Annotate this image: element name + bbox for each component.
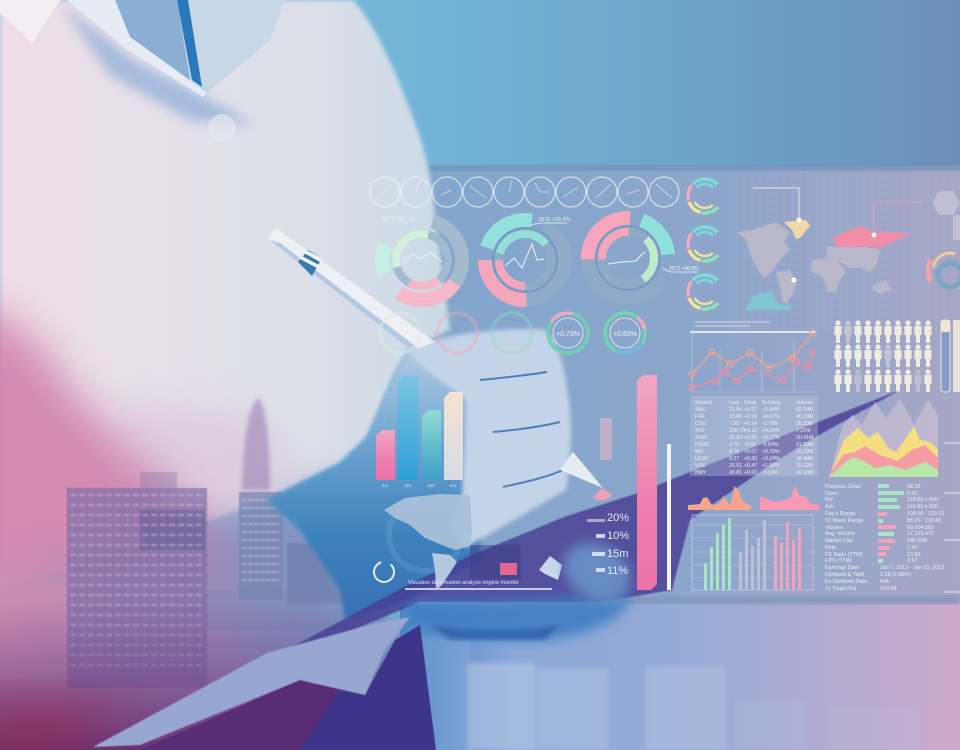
clipboard paper and base: [93, 617, 436, 750]
segmented donut column: [688, 179, 722, 309]
Europe and Asia: [826, 246, 880, 272]
South America: [776, 270, 797, 304]
paper sheet: [93, 617, 410, 747]
background city buildings, lower right: [420, 637, 920, 750]
panel bottom shadow: [620, 596, 960, 604]
stock data table: MO: [695, 449, 703, 455]
stock data table: +0.07: [744, 449, 757, 455]
stock data table: XOI: [695, 428, 704, 434]
small ring icon: [374, 562, 394, 582]
bottom white rule: [405, 588, 552, 590]
bar chart: [692, 515, 813, 590]
right edge ring chart: [928, 248, 960, 292]
small orange area chart: [688, 486, 751, 510]
pink blot: [593, 488, 612, 500]
shirt torso: [0, 0, 450, 590]
gauge values: [556, 331, 637, 338]
pink bars: [774, 522, 801, 590]
stock stats list: 108.56 - 119.15: [907, 511, 944, 517]
thin white bar: [667, 444, 671, 590]
collar and tie: [0, 0, 285, 142]
collar shadow: [60, 3, 255, 125]
percentage labels and bars: [587, 512, 629, 577]
stock data table: 16.22M: [796, 463, 813, 469]
stock data table: +0.14: [744, 421, 757, 427]
stock data table: BMY: [695, 470, 707, 476]
panel grid texture: [730, 170, 960, 330]
stock data table: -0.22: [744, 442, 756, 448]
pale tower silhouette: [242, 398, 270, 490]
stock data table: 8.70: [729, 449, 739, 455]
Russia: [833, 226, 910, 248]
stock stats list: Beta: [825, 545, 836, 551]
stock data table: +3.24%: [762, 456, 780, 462]
donut chart 1: [382, 217, 462, 300]
stock data table: VSX: [695, 463, 706, 469]
shirt button: [208, 114, 236, 142]
red map block: [500, 563, 517, 575]
Australia: [873, 280, 892, 294]
globe map overlay: [374, 494, 562, 590]
right collar: [67, 0, 207, 97]
stock stats list: Bid: [825, 497, 833, 503]
panel top edge: [430, 165, 960, 171]
North America: [737, 222, 790, 278]
stock data table: 21.03M: [796, 442, 813, 448]
stock data table: 19.23M: [796, 449, 813, 455]
stock data table: +0.27: [744, 407, 757, 413]
neck shadow: [115, 0, 190, 80]
stock stats list: 88.20 - 119.60: [907, 518, 941, 524]
pink stat bars: [878, 512, 896, 556]
stock stats list: Market Cap: [825, 538, 853, 544]
stock data table: FXF: [695, 414, 705, 420]
stock data table: +0.77%: [762, 435, 780, 441]
stock stats list: 52 Week Range: [825, 518, 864, 524]
axis labels: S02: [404, 483, 412, 488]
tall pink bar: [637, 375, 657, 590]
left collar: [0, 0, 60, 43]
left 3D bar chart: [376, 376, 463, 488]
stock data table: 30.54: [729, 435, 742, 441]
stock stats list: Day's Range: [825, 511, 856, 517]
stock stats list: PE Ratio (TTM): [825, 552, 863, 558]
stock data table: +0.47: [744, 463, 757, 469]
grey bars: [739, 520, 766, 590]
percentage labels and bars: 11%: [607, 565, 628, 577]
purple clipboard diagonal: [290, 390, 900, 652]
stock data table: 9.07: [729, 456, 739, 462]
stock data table: -0.19%: [762, 470, 779, 476]
stock data table: 45.23M: [796, 414, 813, 420]
stock data table: +0.30: [744, 456, 757, 462]
stock data table: 18.40M: [796, 456, 813, 462]
shadowed sleeve and wrist: [267, 345, 480, 620]
stock stats list: Ask: [825, 504, 834, 510]
stock stats list: Dividend & Yield: [825, 572, 864, 578]
stock stats list: Volume: [825, 525, 843, 531]
lower left dark fade: [0, 600, 400, 750]
stock data table: 7.95: [729, 421, 739, 427]
stock data table: -1.78%: [762, 421, 779, 427]
stock data table: DGAZ: [695, 442, 709, 448]
australia: [539, 556, 562, 580]
stock data table: 35.23M: [796, 421, 813, 427]
donut bottom: [688, 275, 722, 309]
donut chart 3: [588, 218, 699, 298]
Greenland: [784, 220, 810, 239]
left city buildings: [0, 472, 387, 750]
stock stats list: 58.25: [907, 484, 920, 490]
gauge values: +0.73%: [556, 331, 580, 338]
label: 2072 +26.4%: [538, 217, 571, 223]
dashboard: row of clock dials: [370, 177, 679, 207]
stock data table: +1.56%: [762, 463, 780, 469]
layered area chart: [829, 398, 938, 477]
axis labels: S03: [427, 483, 435, 488]
dark map inset: [470, 545, 521, 579]
stock stats list: 1.43: [907, 545, 918, 551]
stock data table: 21.84: [729, 407, 742, 413]
line chart: [689, 322, 816, 392]
percentage labels and bars: 15m: [607, 548, 628, 560]
stock stats list: 118.93 x 300: [907, 504, 938, 510]
stock data table: SAX: [695, 407, 706, 413]
stock stats list: 1y Target Est: [825, 586, 857, 592]
pen: [268, 228, 612, 500]
stock stats list: 585.50B: [907, 538, 927, 544]
stock data table: XSW: [695, 435, 707, 441]
stock data table: % Chng: [762, 400, 781, 406]
stock stats list: 118.80 x 400: [907, 497, 938, 503]
stock data table: +4.10: [744, 428, 757, 434]
label: 2072 +51.1%: [382, 217, 415, 223]
small pink area chart: [760, 485, 819, 510]
stock stats list: EPS (TTM): [825, 558, 852, 564]
stock stats list: 8.57: [907, 558, 918, 564]
stock stats list: 27,128,471: [907, 531, 934, 537]
leader lines: [753, 188, 799, 220]
stock stats list: Open: [825, 491, 838, 497]
lower left crimson corner: [0, 700, 120, 750]
magenta clipboard shadow: [140, 680, 340, 750]
stock data table: 18.81: [729, 470, 742, 476]
stock stats list: Jan 7, 2013 - Jan 10, 2013: [880, 565, 944, 571]
tall tower: [67, 488, 207, 688]
stock stats list: Ex-Dividend Date: [825, 579, 867, 585]
stock stats list: Earnings Date: [825, 565, 859, 571]
undershirt at neck: [115, 0, 285, 95]
teal area: [746, 290, 791, 310]
stock data table: Volume: [796, 400, 813, 406]
stock stats list: 1.28 (2.88%): [880, 572, 911, 578]
navy clipboard base: [140, 625, 436, 750]
stock data table: 26.61: [729, 463, 742, 469]
hand holding pen: [408, 329, 571, 547]
stock data table: 20.41M: [796, 435, 813, 441]
stock data table: 3.76: [729, 442, 739, 448]
stock data table: +1.84%: [762, 407, 780, 413]
world map: [737, 188, 922, 310]
stock data table: 62.59M: [796, 407, 813, 413]
stock data table: +0.02: [744, 470, 757, 476]
donut top: [688, 179, 722, 213]
stock stats list: Avg. Volume: [825, 531, 855, 537]
small gauges row: [380, 313, 645, 353]
hand shadow band below clipboard: [408, 596, 630, 640]
dashboard panel: [380, 166, 960, 604]
stock data table: +0.67%: [762, 414, 780, 420]
stock data table: UCAT: [695, 456, 710, 462]
stock stats list: Previous Close: [825, 484, 861, 490]
axis labels: [381, 483, 457, 488]
vertical level bars: [941, 320, 960, 392]
pen tip: [560, 452, 603, 488]
stock data table: 7.21M: [796, 428, 810, 434]
people pictogram grid: [834, 320, 932, 392]
gauge values: +0.83%: [613, 331, 637, 338]
percentage labels and bars: 20%: [607, 512, 629, 524]
left city haze: [0, 480, 345, 750]
stock stats list: 100.69: [880, 586, 896, 592]
stock data table: 16.18M: [796, 470, 813, 476]
stock data table: 228.79: [729, 428, 745, 434]
far right thumbnails: [944, 443, 960, 592]
map markers: [796, 218, 802, 222]
tie: [177, 0, 202, 87]
stock data table: CSX: [695, 421, 706, 427]
dark shadow under fingers: [430, 625, 560, 640]
stock data table: +0.56: [744, 435, 757, 441]
stock data table: +0.04%: [762, 428, 780, 434]
axis labels: S01: [381, 483, 389, 488]
donut middle: [688, 227, 722, 261]
donut chart 2: [485, 217, 571, 300]
caption under globe: Visualize data market analyze engine monitor: [408, 580, 519, 586]
stock data table: +0.29%: [762, 449, 780, 455]
back of hand: [408, 329, 571, 547]
label: 2072 +48.6%: [669, 266, 699, 272]
Africa: [811, 257, 846, 292]
bar chart grid: [372, 375, 466, 480]
lower city band: [400, 600, 960, 750]
percentage labels and bars: 10%: [607, 530, 629, 542]
hexagons, top right: [932, 191, 960, 240]
thumb: [553, 531, 641, 613]
second tower: [239, 492, 283, 600]
stock data table: Symbol: [695, 400, 712, 406]
stock data table: Chng: [744, 400, 757, 406]
lilac shading, lower shirt: [120, 400, 300, 540]
stock data table: [690, 396, 818, 476]
pink wash, left side: [0, 295, 240, 750]
green stat bars: [878, 484, 904, 563]
stock stats list: 0.00: [907, 491, 918, 497]
small gradient legend behind fingers: [600, 418, 612, 460]
stock stats list: [825, 484, 944, 592]
green bars: [704, 518, 731, 590]
stock data table: 23.84: [729, 414, 742, 420]
stock stats list: 13.85: [907, 552, 920, 558]
stock stats list: 69,604,561: [907, 525, 934, 531]
stock stats list: N/A: [880, 579, 889, 585]
stock data table: -5.64%: [762, 442, 779, 448]
stock data table: Last: [729, 400, 739, 406]
stock data table: +0.16: [744, 414, 757, 420]
axis labels: S04: [449, 483, 457, 488]
finger creases: [480, 372, 563, 487]
